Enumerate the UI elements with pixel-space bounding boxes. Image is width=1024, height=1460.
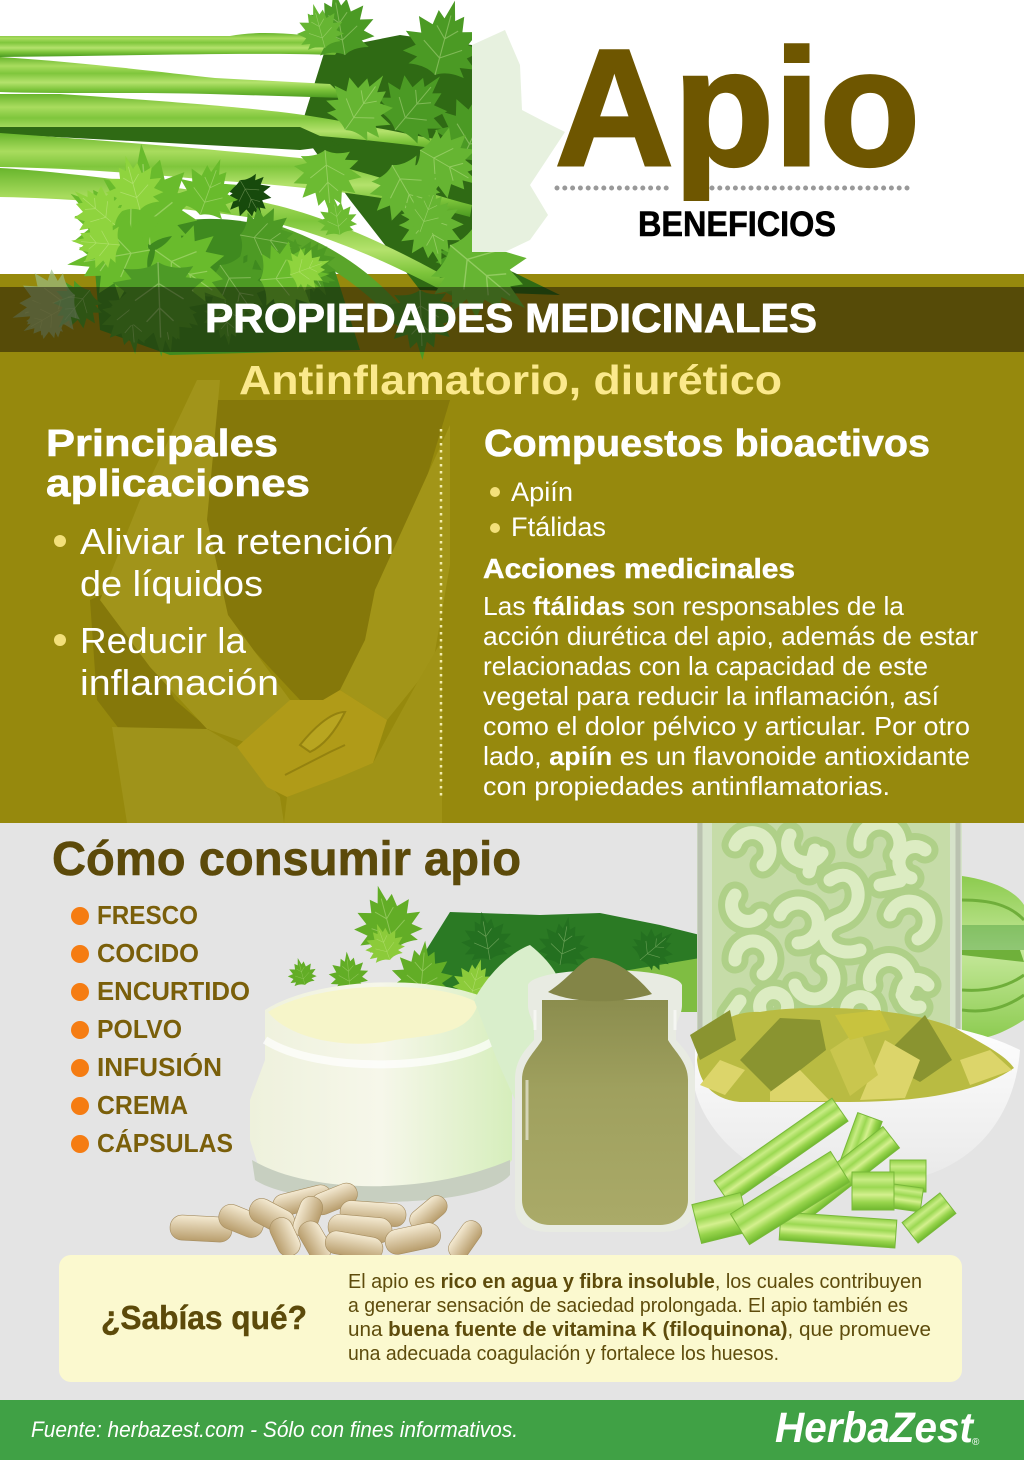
image: capsules	[169, 1180, 486, 1265]
heading: principales aplicaciones: aplicaciones	[46, 463, 310, 505]
list: applications: inflamación	[80, 662, 279, 703]
lower left bright leaves	[54, 207, 336, 340]
list: forms of consumption: CREMA	[97, 1090, 188, 1120]
callout text: una buena fuente de vitamina K (filoquinona), que promueve	[348, 1318, 931, 1341]
list: forms of consumption: CÁPSULAS	[97, 1128, 233, 1158]
image: celery stalk bunch	[962, 876, 1024, 1040]
text block: medicinal actions: Las ftálidas son responsables de la	[483, 591, 905, 621]
text block: medicinal actions: lado, apiín es un flavonoide antioxidante	[483, 741, 970, 771]
list: forms of consumption: POLVO	[97, 1014, 182, 1044]
text block: medicinal actions: acción diurética del apio, además de estar	[483, 621, 978, 651]
title: Apio: Apio	[555, 16, 920, 201]
heading: compuestos bioactivos: Compuestos bioactivos	[484, 423, 930, 465]
dark foliage shade	[300, 35, 560, 295]
text block: medicinal actions	[483, 591, 978, 801]
callout text: una adecuada coagulación y fortalece los huesos.	[348, 1342, 779, 1365]
list: applications	[54, 521, 394, 703]
image: bowl of cooked celery	[690, 1008, 1020, 1180]
image: jar of celery slices	[697, 823, 962, 1033]
list: forms of consumption: INFUSIÓN	[97, 1052, 222, 1082]
heading: acciones medicinales: Acciones medicinales	[483, 553, 795, 584]
title band	[0, 287, 1024, 352]
logo: HerbaZest: HerbaZest	[775, 1404, 975, 1452]
dotted divider	[557, 186, 910, 190]
image: jar of celery powder	[515, 958, 695, 1232]
list: forms of consumption: FRESCO	[97, 900, 198, 930]
callout heading: ¿Sabías qué?	[101, 1299, 307, 1336]
text block: medicinal actions: vegetal para reducir la inflamación, así	[483, 681, 940, 711]
heading: principales aplicaciones	[46, 423, 310, 505]
image: light green ribbon leaf	[474, 945, 561, 1100]
heading: propiedades medicinales: PROPIEDADES MEDICINALES	[205, 295, 817, 341]
image: fresh celery leaves	[284, 877, 700, 1012]
source note: Fuente: herbazest.com - Sólo con fines informativos.	[31, 1417, 518, 1442]
text block: medicinal actions: con propiedades antinflamatorias.	[483, 771, 890, 801]
heading: cómo consumir apio: Cómo consumir apio	[52, 833, 521, 886]
subtitle: beneficios: BENEFICIOS	[638, 205, 836, 244]
callout: did you know	[59, 1255, 962, 1382]
list: forms of consumption	[71, 900, 250, 1158]
heading: principales aplicaciones: Principales	[46, 423, 278, 465]
callout text: a generar sensación de saciedad prolongada. El apio también es	[348, 1294, 908, 1317]
registered mark: ®	[972, 1437, 980, 1448]
list: compounds: Apiín	[511, 477, 573, 507]
footer bar	[0, 1400, 1024, 1460]
image: celery bunch	[0, 0, 565, 361]
panel: medicinal properties	[0, 274, 1024, 823]
callout text: El apio es rico en agua y fibra insoluble, los cuales contribuyen	[348, 1270, 922, 1293]
callout text	[348, 1270, 931, 1365]
panel: how to consume	[0, 823, 1024, 1400]
image: chopped celery sticks	[692, 1098, 956, 1248]
image: cream jar	[250, 982, 512, 1202]
text block: medicinal actions: relacionadas con la capacidad de este	[483, 651, 928, 681]
illustration: hands over abdomen	[90, 380, 450, 823]
text block: medicinal actions: como el dolor pélvico y articular. Por otro	[483, 711, 970, 741]
list: applications: Reducir la	[80, 620, 247, 661]
list: compounds	[490, 477, 606, 542]
list: forms of consumption: ENCURTIDO	[97, 976, 250, 1006]
green mass behind lower leaves	[95, 219, 360, 355]
list: applications: de líquidos	[80, 563, 263, 604]
subheading: antinflamatorio, diurético: Antinflamatorio, diurético	[239, 357, 782, 403]
list: compounds: Ftálidas	[511, 512, 606, 542]
list: forms of consumption: COCIDO	[97, 938, 199, 968]
pale ghost foliage	[472, 30, 565, 252]
list: applications: Aliviar la retención	[80, 521, 394, 562]
